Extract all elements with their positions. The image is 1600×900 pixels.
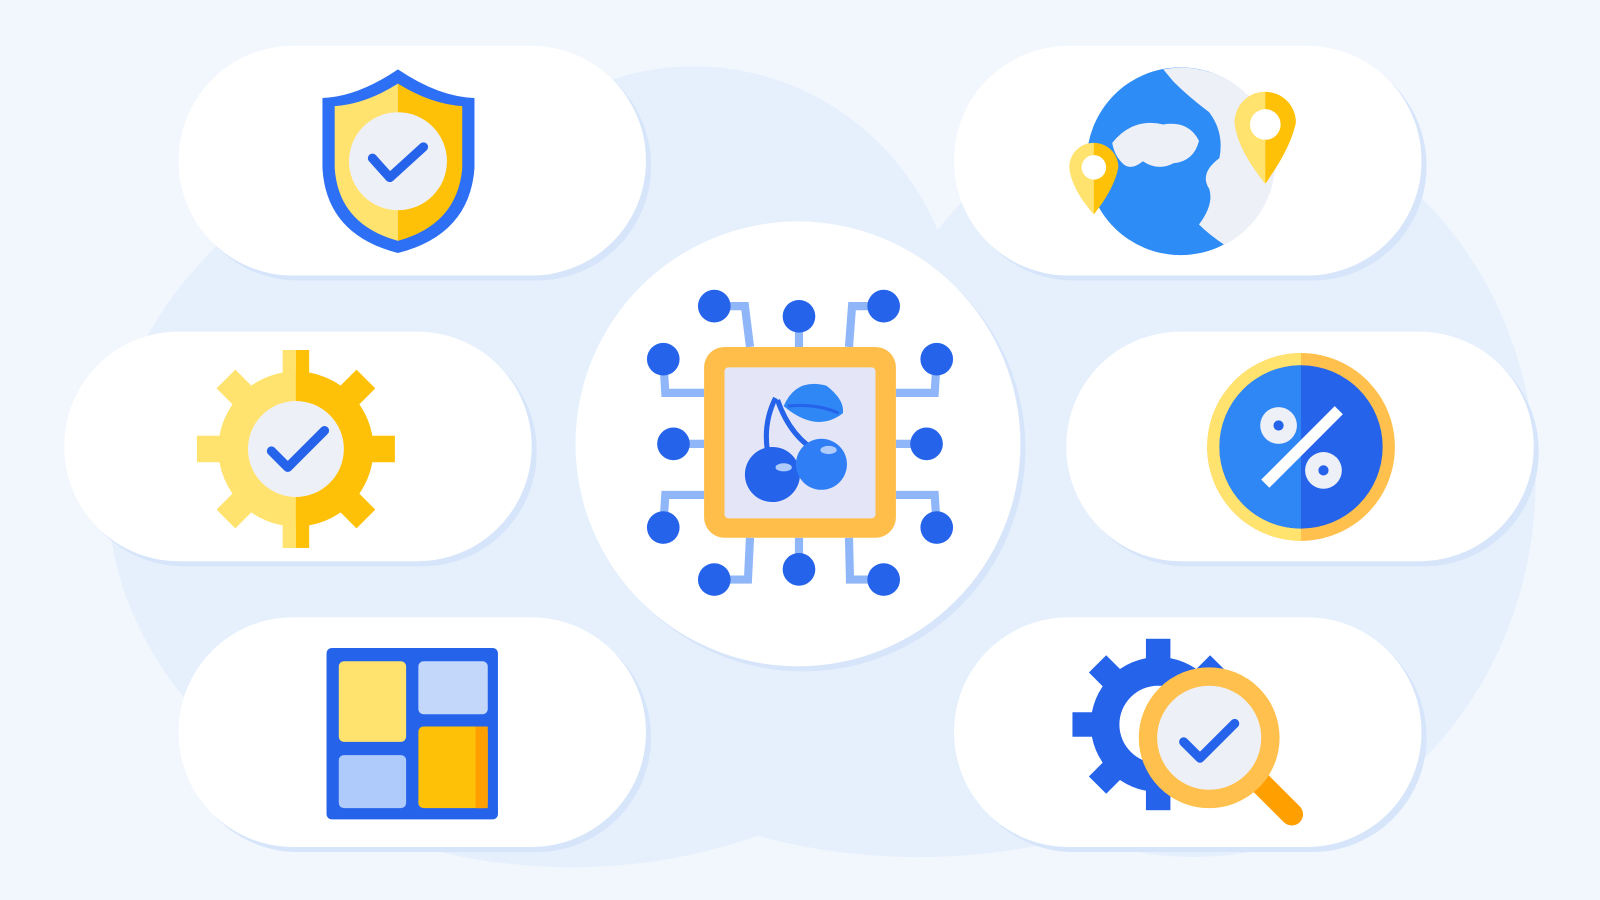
icon: percent coin: [1207, 353, 1395, 541]
panel: center chip: [576, 221, 1026, 671]
background blob: [107, 66, 1536, 867]
icon: yellow gear: [197, 350, 395, 548]
panel: shield: [179, 46, 651, 281]
panel: gear: [64, 332, 537, 566]
panel: percent: [1066, 332, 1539, 566]
icon: gear with magnifier: [1072, 639, 1292, 814]
panel: globe: [954, 46, 1427, 281]
panel: gear magnifier: [954, 617, 1427, 852]
icon: shield: [322, 69, 474, 253]
panel: grid: [179, 617, 651, 852]
icon: chip with cherries: [647, 290, 953, 596]
icon: globe with pins: [1069, 67, 1296, 255]
icon: tile grid: [327, 648, 498, 819]
